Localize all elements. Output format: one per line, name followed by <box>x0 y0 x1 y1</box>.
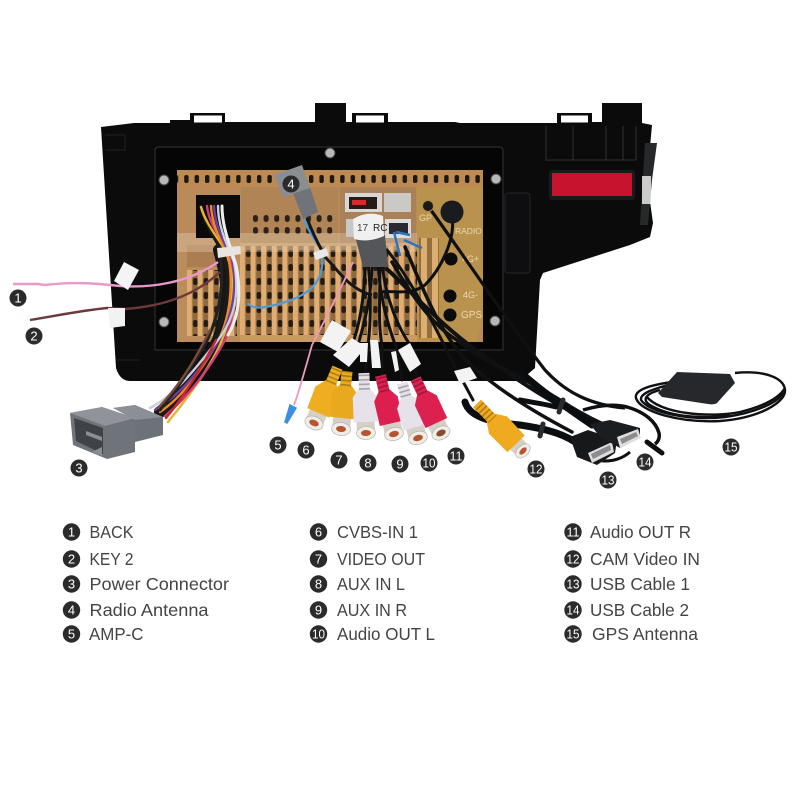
legend item 13: USB Cable 1 <box>590 574 690 594</box>
callout 4: 4 <box>287 176 295 192</box>
blue terminal <box>285 405 296 423</box>
legend item 3: 3 <box>68 576 75 592</box>
power socket recess <box>196 195 240 238</box>
antenna cables <box>380 200 625 408</box>
RCA plug 6 yellow <box>299 363 349 434</box>
RCA plug 9 red <box>369 373 407 443</box>
legend item 8 <box>310 574 405 594</box>
legend item 5: 5 <box>68 626 75 642</box>
legend item 14: 14 <box>566 602 580 618</box>
legend item 11: Audio OUT R <box>590 522 691 542</box>
RCA plug 12 yellow <box>468 395 536 464</box>
pink AMP-C wire <box>285 262 353 423</box>
callout 7 <box>330 452 348 468</box>
callout 10: 10 <box>422 456 436 470</box>
right antenna plate: 4G+ <box>462 254 479 264</box>
legend item 9: 9 <box>315 602 322 618</box>
red reflector <box>549 170 635 200</box>
wire 1 BACK <box>13 262 218 290</box>
wire tie <box>217 246 241 258</box>
callout 6 <box>298 442 314 458</box>
legend column 3 <box>564 522 700 644</box>
legend item 9 <box>310 600 407 620</box>
legend item 5: AMP-C <box>89 624 144 644</box>
callout 11: 11 <box>450 448 462 464</box>
callout 13: 13 <box>602 472 614 488</box>
wire 2 KEY 2 <box>30 272 220 328</box>
legend item 4: Radio Antenna <box>90 600 209 620</box>
legend item 6: 6 <box>315 524 322 540</box>
legend item 1: 1 <box>68 524 75 540</box>
power connector <box>70 405 163 459</box>
legend item 10: Audio OUT L <box>337 624 435 644</box>
legend item 5 <box>63 624 143 644</box>
GPS antenna <box>636 372 785 421</box>
tag <box>108 308 125 328</box>
legend item 3: Power Connector <box>90 574 229 594</box>
callout 3: 3 <box>75 460 83 476</box>
right antenna plate: GP <box>419 213 432 223</box>
video and audio cable bundle <box>346 247 603 432</box>
callout 3 <box>70 460 88 476</box>
callout 5: 5 <box>274 438 282 452</box>
legend item 1 <box>63 522 134 542</box>
callout 14: 14 <box>638 454 652 470</box>
centre connector sockets <box>345 193 411 238</box>
RCA plug 8 white <box>352 373 378 440</box>
RCA plug 11 red <box>405 374 455 444</box>
legend item 13: 13 <box>566 576 580 592</box>
legend item 15: 15 <box>566 626 580 642</box>
USB cable loop <box>575 405 662 461</box>
legend item 2 <box>63 549 133 569</box>
power harness wires <box>150 206 239 422</box>
callout 9 <box>392 456 408 472</box>
cable coil <box>636 372 785 421</box>
legend item 2: 2 <box>68 552 75 566</box>
hub collar and boot: RC <box>373 223 387 234</box>
legend item 7: 7 <box>315 552 322 566</box>
callout 2 <box>26 328 42 344</box>
hub collar and boot <box>353 214 388 267</box>
callout 1: 1 <box>14 290 22 306</box>
legend item 2: KEY 2 <box>90 549 134 569</box>
right antenna plate <box>417 187 483 342</box>
callout 9: 9 <box>396 456 404 472</box>
legend item 8: 8 <box>315 576 322 592</box>
legend column 2 <box>310 522 435 644</box>
hub collar and boot: 17 <box>357 223 369 234</box>
right antenna plate: 4G- <box>463 290 478 300</box>
legend item 9: AUX IN R <box>337 600 407 620</box>
screws <box>159 148 501 327</box>
callout 5 <box>270 436 286 454</box>
callout 2: 2 <box>30 328 38 344</box>
head unit back panel <box>101 103 657 381</box>
callout 12: 12 <box>530 462 542 476</box>
legend item 12: 12 <box>566 552 580 566</box>
callout 4 <box>282 176 300 192</box>
legend item 8: AUX IN L <box>337 574 405 594</box>
right antenna plate: GPS <box>461 310 482 321</box>
legend column 1 <box>63 522 229 644</box>
RCA plug 7 yellow <box>327 370 360 437</box>
callout 7: 7 <box>335 452 343 468</box>
RCA plug 10 white <box>391 380 431 448</box>
radio antenna connector <box>248 165 372 307</box>
legend item 14: USB Cable 2 <box>590 600 689 620</box>
callout 15: 15 <box>724 440 738 454</box>
cable tags <box>320 320 477 384</box>
legend item 15: GPS Antenna <box>592 624 698 644</box>
legend item 6: CVBS-IN 1 <box>337 522 418 542</box>
gold metal chassis <box>177 170 483 342</box>
USB cable 2 connector <box>590 420 641 448</box>
callout numbers <box>10 176 740 488</box>
legend item 12: CAM Video IN <box>590 549 700 569</box>
USB cable 1 connector <box>570 430 617 465</box>
legend item 7: VIDEO OUT <box>337 549 425 569</box>
callout 8: 8 <box>364 456 372 470</box>
legend item 1: BACK <box>90 522 134 542</box>
legend item 11: 11 <box>566 524 580 540</box>
callout 1 <box>10 290 26 306</box>
right antenna plate: RADIO <box>455 226 482 236</box>
tag <box>114 262 139 290</box>
thick USB cables behind plug <box>465 372 592 442</box>
legend item 4: 4 <box>68 602 75 618</box>
legend item 10: 10 <box>312 626 325 642</box>
receiver puck <box>658 372 735 404</box>
callout 6: 6 <box>302 442 310 458</box>
callout 8 <box>360 454 376 472</box>
